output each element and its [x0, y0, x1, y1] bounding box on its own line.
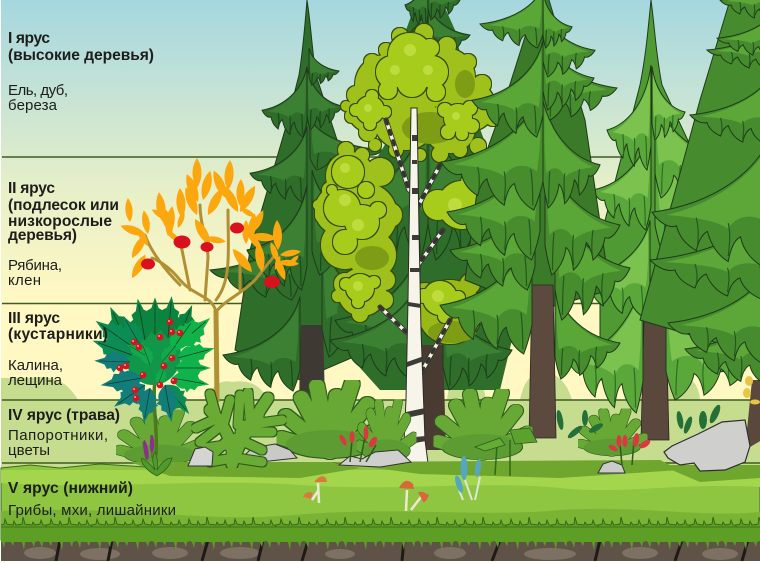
- shrub: by birch: [360, 403, 414, 462]
- tree: main spruce: [440, 0, 630, 438]
- text: tier V: [8, 480, 176, 519]
- small rock right: [598, 461, 625, 473]
- text: tier I: [8, 30, 154, 114]
- distant hills: [1, 372, 745, 425]
- text: tier IV: [8, 407, 120, 459]
- text: tier II: Рябина,: [8, 257, 62, 274]
- yellow mushrooms on right trunk: [743, 376, 760, 404]
- crown: right: [423, 173, 500, 229]
- tree trunk: light spruce: [641, 320, 669, 440]
- tree: back spruce centre: [330, 0, 515, 450]
- text: tier I: береза: [8, 97, 58, 114]
- text: tier II: деревья): [8, 227, 77, 244]
- rowan tree: [119, 158, 301, 402]
- tree trunk: main spruce: [529, 285, 556, 438]
- text: tier III: (кустарники): [8, 326, 108, 343]
- tree: birch: [313, 24, 501, 463]
- grass band and soil: [0, 516, 760, 563]
- tree: light spruce: [568, 0, 760, 440]
- tier divider lines: [2, 157, 760, 463]
- soil: [1, 539, 760, 561]
- text: tier III: III ярус: [8, 310, 60, 327]
- rowan berries: [141, 222, 280, 288]
- text: tier I: I ярус: [8, 30, 50, 47]
- viburnum leaves: [88, 295, 219, 425]
- text: tier II: клен: [8, 272, 41, 289]
- text: tier V: V ярус (нижний): [8, 480, 133, 497]
- text: tier IV: IV ярус (трава): [8, 407, 120, 424]
- viburnum berries: [117, 319, 183, 401]
- crown: top: [341, 24, 501, 162]
- tree trunk: back spruce centre: [418, 345, 446, 450]
- small rock left: [188, 447, 213, 466]
- tree: back spruce left: [210, 0, 400, 402]
- red flowers centre: [338, 426, 379, 462]
- text: tier I: (высокие деревья): [8, 47, 154, 64]
- viburnum shrub: [88, 295, 219, 455]
- text: tier V: Грибы, мхи, лишайники: [8, 502, 176, 519]
- text: tier II: [8, 180, 119, 289]
- mushroom group orange: [399, 481, 429, 511]
- rowan leaves: [119, 158, 301, 281]
- text: tier I: Ель, дуб,: [8, 82, 68, 99]
- crown: lower right: [410, 274, 494, 344]
- big boulder: [664, 420, 750, 471]
- text: tier III: лещина: [8, 372, 63, 389]
- red flowers right: [607, 433, 652, 465]
- dark leaves behind boulder: [555, 403, 722, 440]
- text: tier IV: Папоротники,: [8, 427, 108, 444]
- green broadleaf plants: [475, 428, 537, 476]
- shrub: centre left: [282, 384, 381, 458]
- rowan trunk and branches: [145, 205, 275, 400]
- crown: left: [313, 142, 402, 322]
- fern: [196, 392, 282, 464]
- tree trunk: right spruce: [745, 380, 760, 450]
- text: tier III: [8, 310, 108, 389]
- tree: right spruce: [640, 0, 760, 450]
- shrub: right: [581, 411, 644, 456]
- text: tier III: Калина,: [8, 357, 63, 374]
- mushroom group blue: [453, 456, 482, 500]
- viburnum stem: [152, 325, 156, 455]
- birch crown: [313, 24, 501, 344]
- ground: [1, 460, 760, 540]
- text: tier II: (подлесок или: [8, 197, 119, 214]
- text: tier II: II ярус: [8, 180, 55, 197]
- text: tier II: низкорослые: [8, 213, 112, 230]
- shrub: behind viburnum: [120, 412, 201, 464]
- shrub: centre: [438, 393, 528, 459]
- birch trunk: [403, 108, 428, 463]
- shrubs: [120, 384, 644, 464]
- purple flowers: [142, 435, 172, 476]
- rock behind fern: [240, 444, 297, 462]
- tree trunk: back spruce left: [299, 325, 325, 402]
- text: tier IV: цветы: [8, 442, 50, 459]
- mushroom group left: [303, 476, 327, 503]
- small rock centre: [339, 450, 411, 467]
- birch branches: [380, 120, 450, 375]
